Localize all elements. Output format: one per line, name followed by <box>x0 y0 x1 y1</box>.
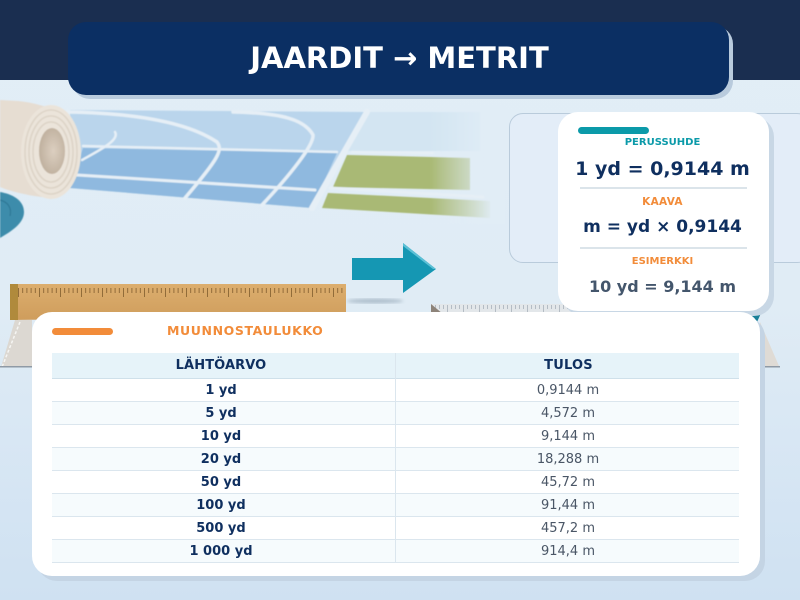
row: 50 yd: 50 yd <box>201 475 241 490</box>
panel: conversion table <box>32 312 760 576</box>
row: 100 yd <box>52 494 739 517</box>
formula: m = yd × 0,9144 <box>583 217 742 237</box>
title bar <box>68 22 729 95</box>
panel: formula card <box>558 112 769 311</box>
conversion table <box>52 353 739 563</box>
row: 1 yd: 0,9144 m <box>537 383 599 398</box>
fabric rolls <box>0 100 81 238</box>
row: 500 yd: 500 yd <box>196 521 246 536</box>
example: 10 yd = 9,144 m <box>589 277 736 296</box>
row: 50 yd: 45,72 m <box>541 475 595 490</box>
table header: LÄHTÖARVO <box>176 358 266 373</box>
row: 100 yd: 100 yd <box>196 498 246 513</box>
row: 10 yd <box>52 425 739 448</box>
row: 20 yd <box>52 448 739 471</box>
row: 500 yd: 457,2 m <box>541 521 595 536</box>
table heading: MUUNNOSTAULUKKO <box>167 323 323 338</box>
row: 500 yd <box>52 517 739 540</box>
base relation: 1 yd = 0,9144 m <box>575 158 750 180</box>
wooden ruler <box>10 284 403 320</box>
row: 1 000 yd <box>52 540 739 563</box>
title: JAARDIT → METRIT <box>250 41 549 75</box>
row: 5 yd: 5 yd <box>205 406 237 421</box>
label: perussuhde: PERUSSUHDE <box>625 137 700 148</box>
row: 50 yd <box>52 471 739 494</box>
table header <box>52 353 739 379</box>
row: 10 yd: 9,144 m <box>541 429 595 444</box>
tape left <box>1 320 32 367</box>
table header: TULOS <box>544 358 593 373</box>
accent bar <box>578 127 649 134</box>
row: 1 000 yd: 914,4 m <box>541 544 595 559</box>
row: 100 yd: 91,44 m <box>541 498 595 513</box>
tape right <box>431 304 780 368</box>
accent bar <box>52 328 113 335</box>
ghost panel <box>509 113 800 263</box>
row: 5 yd: 4,572 m <box>541 406 595 421</box>
row: 20 yd: 18,288 m <box>537 452 599 467</box>
label: kaava: KAAVA <box>642 196 683 208</box>
header band <box>0 0 800 80</box>
row: 5 yd <box>52 402 739 425</box>
label: esimerkki: ESIMERKKI <box>632 256 693 267</box>
row: 10 yd: 10 yd <box>201 429 241 444</box>
row: 1 yd <box>52 379 739 402</box>
row: 20 yd: 20 yd <box>201 452 241 467</box>
row: 1 yd: 1 yd <box>205 383 237 398</box>
row: 1 000 yd: 1 000 yd <box>189 544 252 559</box>
track <box>67 106 505 224</box>
arrow <box>352 243 436 293</box>
